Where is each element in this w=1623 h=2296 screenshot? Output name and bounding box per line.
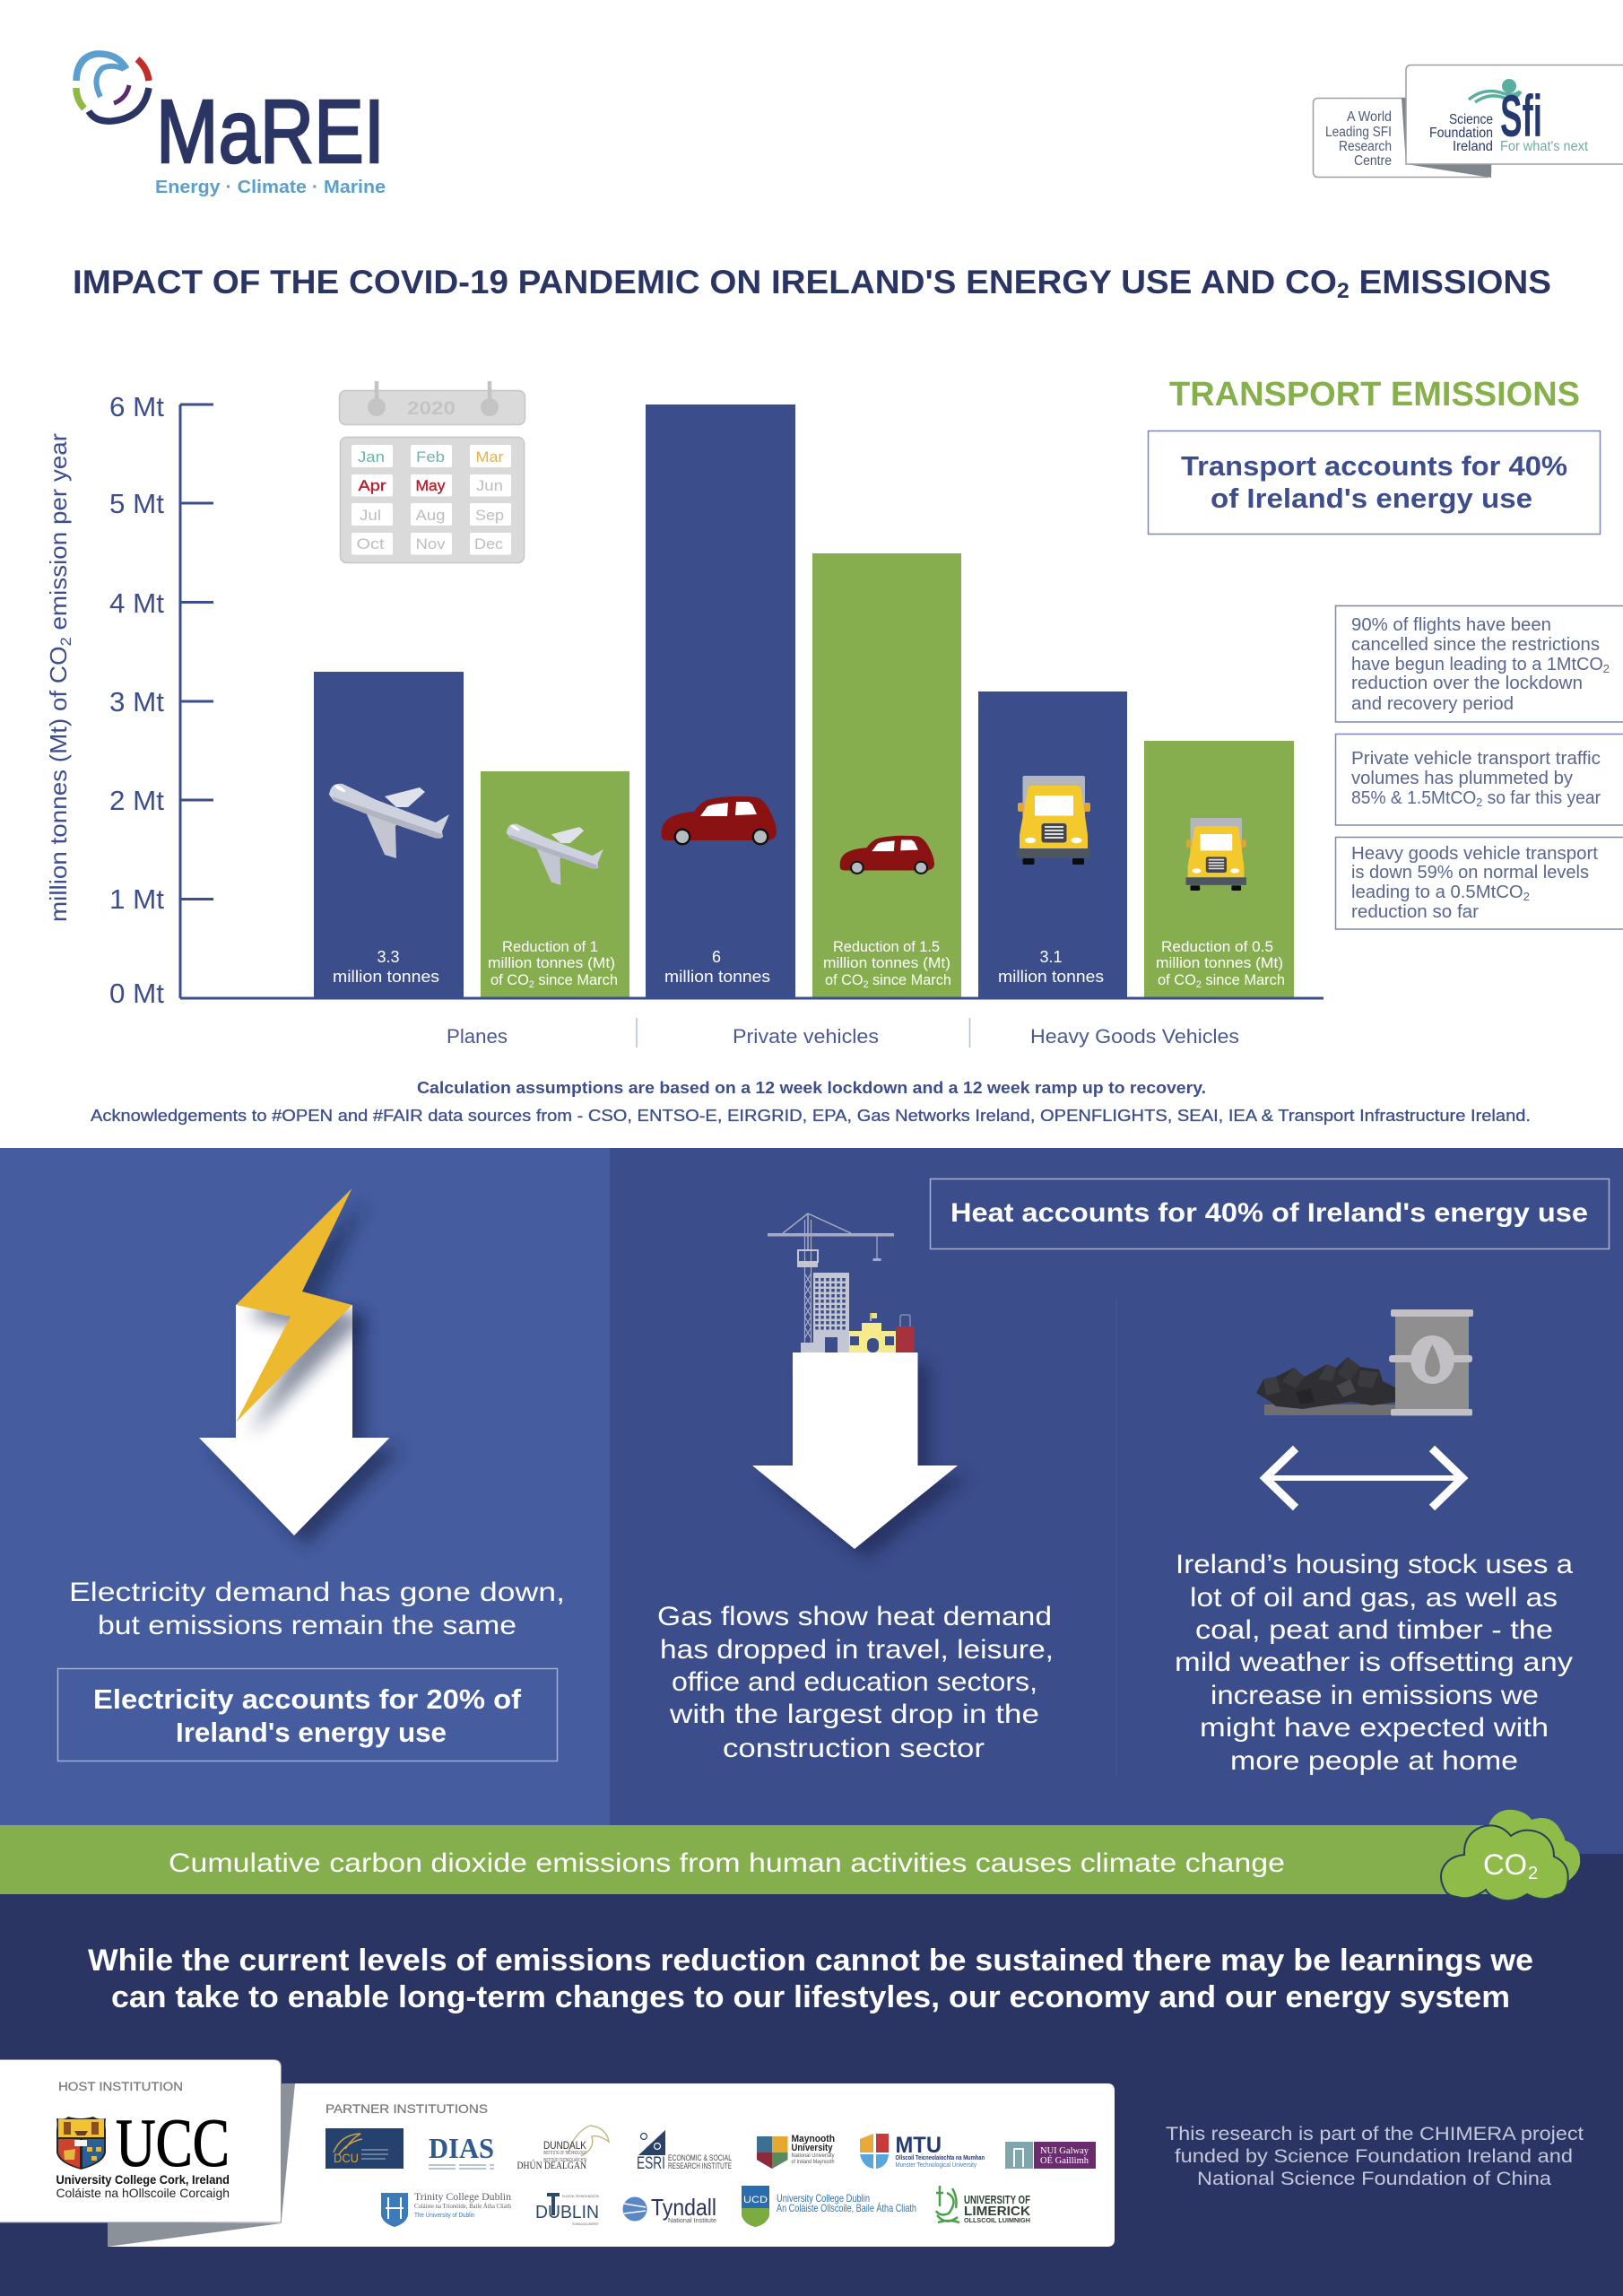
text: gas flows <box>657 1602 1054 1763</box>
text: gas flows: has dropped in travel, leisure, <box>660 1635 1054 1665</box>
text: housing stock <box>1175 1550 1574 1776</box>
callout: transport share <box>1148 430 1600 535</box>
logo: UCD <box>742 2186 916 2227</box>
logo: MaREI <box>76 54 386 197</box>
note: private vehicles: volumes has plummeted by <box>1351 769 1573 788</box>
logo: UCD: UCD <box>743 2195 768 2205</box>
logo: Dundalk Institute of Technology: DHÚN DEALGAN <box>516 2159 586 2171</box>
note: heavy goods vehicles: leading to a 0.5MtCO <box>1351 883 1521 902</box>
category labels: Private vehicles <box>733 1025 879 1048</box>
text: housing stock: lot of oil and gas, as well as <box>1190 1583 1558 1613</box>
logo: Tyndall <box>622 2194 716 2224</box>
panel: host institution: UCC <box>116 2106 230 2181</box>
bar: planes reduction <box>481 771 629 998</box>
note: private vehicles <box>1336 734 1623 825</box>
logo: ESRI: RESEARCH INSTITUTE <box>668 2161 732 2171</box>
bar: planes reduction: since March <box>534 971 618 988</box>
bar: private vehicles baseline <box>646 404 795 998</box>
logo: MaREI: MaREI <box>156 82 385 182</box>
y axis: 4 Mt <box>109 587 164 619</box>
logo: University of Limerick <box>936 2186 1030 2224</box>
logo: Maynooth University: Maynooth <box>791 2134 835 2144</box>
icon: 2020 calendar: Jan <box>358 448 385 465</box>
logo: University of Limerick: LIMERICK <box>964 2204 1030 2219</box>
note: private vehicles: so far this year <box>1482 788 1601 808</box>
logo: ESRI <box>637 2130 732 2173</box>
logo: DIAS: DIAS <box>429 2132 494 2164</box>
icon: CO2 cloud: 2 <box>1528 1864 1538 1883</box>
logo: MTU: Munster Technological University <box>895 2162 976 2169</box>
bar: planes baseline: million tonnes <box>333 968 439 986</box>
icon: 2020 calendar: Dec <box>474 535 504 552</box>
panel: host institution: Coláiste na hOllscoile Corcaigh <box>56 2186 230 2200</box>
logo: Maynooth University <box>757 2134 835 2169</box>
banner: climate change: Cumulative carbon dioxide emissions from human activities causes climate change <box>169 1848 1285 1878</box>
note: heavy goods vehicles <box>1336 838 1623 929</box>
bar: heavy goods vehicles reduction: million tonnes (Mt) <box>1156 954 1283 971</box>
logo: ESRI: ECONOMIC & SOCIAL <box>668 2153 732 2163</box>
logo: Dundalk Institute of Technology <box>516 2126 609 2171</box>
note: heavy goods vehicles: Heavy goods vehicle transport <box>1351 844 1598 864</box>
title: EMISSIONS <box>1350 264 1551 300</box>
icon: 2020 calendar: Nov <box>416 535 446 552</box>
logo: SFI research centre <box>1313 65 1623 178</box>
footnote: assumptions and acknowledgements <box>91 1079 1531 1125</box>
card: Science Foundation Ireland: Sfi <box>1500 83 1542 149</box>
note: flights: and recovery period <box>1351 694 1514 714</box>
logo: ESRI: ESRI <box>637 2154 665 2173</box>
note: flights: reduction over the lockdown <box>1351 674 1583 693</box>
conclusion statement <box>88 1944 1533 2014</box>
icon: 2020 calendar: Jul <box>360 507 381 524</box>
bar: planes reduction: million tonnes (Mt) <box>488 954 615 971</box>
logo: Maynooth University: of Ireland Maynooth <box>791 2160 834 2165</box>
logo: NUI Galway: OÉ Gaillimh <box>1040 2155 1089 2166</box>
text: housing stock: increase in emissions we <box>1211 1681 1539 1710</box>
logo: DCU: DCU <box>334 2151 359 2165</box>
note: flights: have begun leading to a 1MtCO <box>1351 655 1604 674</box>
bar: private vehicles reduction: Reduction of 1.5 <box>833 938 940 955</box>
y axis: million tonnes (Mt) of CO <box>45 664 72 922</box>
panel: partner institutions <box>108 2083 1115 2247</box>
y axis: 2 <box>57 637 74 646</box>
bar: planes reduction: 2 <box>529 979 534 990</box>
bar: private vehicles reduction <box>812 553 961 998</box>
text: electricity demand: but emissions remain the same <box>98 1611 516 1640</box>
logo: NUI Galway: NUI Galway <box>1040 2145 1089 2156</box>
card: A World Leading SFI Research Centre: A World <box>1347 109 1392 125</box>
bar: planes reduction: Reduction of 1 <box>502 938 598 955</box>
note: flights: 90% of flights have been <box>1351 615 1551 635</box>
logo: TU Dublin: DUBLIN <box>535 2203 599 2222</box>
bar: planes baseline: 3.3 <box>377 948 400 966</box>
card: A World Leading SFI Research Centre: Centre <box>1354 153 1392 169</box>
text: gas flows: with the largest drop in the <box>669 1700 1039 1729</box>
note: flights: cancelled since the restrictions <box>1351 635 1600 655</box>
icon: 2020 calendar: Sep <box>475 507 504 524</box>
text: CHIMERA acknowledgement: funded by Science Foundation Ireland and <box>1175 2146 1573 2167</box>
heading: partner institutions: PARTNER INSTITUTIONS <box>325 2101 488 2116</box>
conclusion statement: While the current levels of emissions reduction cannot be sustained there may be learnings we <box>88 1944 1533 1978</box>
text: electricity demand <box>69 1578 565 1640</box>
y axis: 2 Mt <box>109 785 164 816</box>
logo: UCD: University College Dublin <box>777 2192 870 2205</box>
footnote: assumptions and acknowledgements: Calculation assumptions are based on a 12 week lockdown and a 12 week ramp up to recovery. <box>417 1079 1206 1097</box>
icon: 2020 calendar: Aug <box>416 507 445 524</box>
logo: TU Dublin: OLLSCOIL TEICNEOLAÍOCHTA <box>562 2194 599 2198</box>
logo: NUI Galway <box>1005 2142 1096 2169</box>
bar: private vehicles reduction: million tonnes (Mt) <box>823 954 950 971</box>
logo: MaREI: Energy · Climate · Marine <box>155 178 386 197</box>
note: private vehicles: Private vehicle transport traffic <box>1351 749 1601 769</box>
icon: 2020 calendar: Apr <box>359 477 386 494</box>
note: private vehicles: 2 <box>1476 796 1482 809</box>
icon: construction and buildings on down arrow <box>752 1213 969 1560</box>
card: A World Leading SFI Research Centre <box>1313 98 1491 178</box>
bar: heavy goods vehicles baseline: 3.1 <box>1039 948 1063 966</box>
y axis <box>45 391 213 1009</box>
panel: electricity <box>0 1148 610 1854</box>
logo: University of Limerick: UNIVERSITY OF <box>964 2193 1030 2206</box>
logo: Tyndall: National Institute <box>668 2218 716 2224</box>
bar: heavy goods vehicles reduction: since March <box>1202 971 1285 988</box>
category labels: Planes <box>447 1025 508 1048</box>
logo: DCU <box>325 2128 404 2169</box>
note: heavy goods vehicles: reduction so far <box>1351 902 1479 922</box>
callout: electricity share: Ireland's energy use <box>176 1717 447 1748</box>
note: heavy goods vehicles: is down 59% on normal levels <box>1351 863 1589 883</box>
card: Science Foundation Ireland <box>1406 65 1623 164</box>
icon: coal and oil barrel <box>1256 1309 1473 1415</box>
text: gas flows: Gas flows show heat demand <box>657 1602 1052 1631</box>
callout: transport share: Transport accounts for 40% <box>1181 450 1567 482</box>
text: housing stock: more people at home <box>1230 1746 1518 1776</box>
icon: suitcase <box>896 1315 915 1352</box>
text: housing stock: mild weather is offsetting any <box>1175 1648 1573 1677</box>
icon: school <box>849 1313 896 1352</box>
panel: heat background <box>610 1148 1623 1854</box>
logo: TU Dublin: TECHNOLOGICAL UNIVERSITY <box>572 2222 599 2226</box>
note: flights: 2 <box>1603 662 1610 675</box>
text: CHIMERA acknowledgement: National Science Foundation of China <box>1197 2169 1551 2189</box>
card: Science Foundation Ireland: Foundation <box>1429 126 1493 141</box>
conclusion statement: can take to enable long-term changes to our lifestyles, our economy and our energy system <box>111 1980 1510 2014</box>
logo: Maynooth University: National University <box>791 2153 834 2159</box>
card: A World Leading SFI Research Centre: Research <box>1339 139 1392 154</box>
bar: planes baseline <box>314 672 464 998</box>
text: CHIMERA acknowledgement: This research is part of the CHIMERA project <box>1166 2124 1584 2144</box>
callout: heat share: Heat accounts for 40% of Ireland's energy use <box>950 1198 1588 1228</box>
bar: heavy goods vehicles reduction: 2 <box>1196 979 1202 990</box>
card: A World Leading SFI Research Centre: Leading SFI <box>1325 125 1392 140</box>
bar: private vehicles reduction: of CO <box>825 971 864 988</box>
bar: heavy goods vehicles reduction: Reduction of 0.5 <box>1161 938 1273 955</box>
heading: transport emissions: TRANSPORT EMISSIONS <box>1169 376 1580 413</box>
note: flights <box>1336 606 1623 722</box>
logo: Trinity College Dublin: Trinity College Dublin <box>414 2190 511 2203</box>
bar: heavy goods vehicles reduction <box>1144 741 1294 998</box>
note: heavy goods vehicles: 2 <box>1523 890 1530 903</box>
icon: barrel <box>1389 1309 1473 1415</box>
banner: climate change <box>0 1825 1488 1894</box>
callout: electricity share: Electricity accounts for 20% of <box>93 1683 522 1715</box>
icon: 2020 calendar: Oct <box>357 535 385 552</box>
bar: private vehicles reduction: since March <box>868 971 951 988</box>
callout: electricity share <box>57 1668 558 1761</box>
logo: MTU: MTU <box>895 2133 942 2158</box>
bar: private vehicles reduction: 2 <box>864 979 868 990</box>
title: 2 <box>1337 279 1350 303</box>
callout: transport share: of Ireland's energy use <box>1211 483 1532 514</box>
card: Science Foundation Ireland: Science <box>1449 112 1493 127</box>
footnote: assumptions and acknowledgements: Acknowledgements to #OPEN and #FAIR data sources from - CSO, ENTSO-E, EIRGRID, EPA, Gas Networks Ireland, OPENFLIGHTS, SEAI, IEA & Transport Infrastructure Ireland. <box>91 1107 1531 1125</box>
card: Science Foundation Ireland: Ireland <box>1453 139 1493 154</box>
y axis: 6 Mt <box>109 391 164 422</box>
logo: Trinity College Dublin: Coláiste na Tríonóide, Baile Átha Cliath <box>414 2203 511 2210</box>
icon: 2020 calendar: 2020 <box>407 398 456 419</box>
icon: 2020 calendar <box>339 381 525 563</box>
text: housing stock: might have expected with <box>1200 1713 1549 1743</box>
y axis: 5 Mt <box>109 488 164 519</box>
bar: heavy goods vehicles reduction: of CO <box>1158 971 1197 988</box>
bar: heavy goods vehicles baseline: million tonnes <box>998 968 1104 986</box>
y axis: 3 Mt <box>109 686 164 718</box>
icon: bolt and down arrow <box>199 1188 402 1546</box>
logo: Tyndall: Tyndall <box>651 2194 716 2221</box>
logo: Trinity College Dublin: The University of Dublin <box>414 2211 475 2219</box>
y axis: emission per year <box>45 433 72 637</box>
bar: heavy goods vehicles baseline <box>978 691 1127 998</box>
logo: TU Dublin <box>535 2193 599 2226</box>
text: gas flows: office and education sectors, <box>672 1667 1037 1697</box>
icon: 2020 calendar: May <box>416 477 446 494</box>
bar chart: transport emissions <box>45 391 1324 1048</box>
logo: Trinity College Dublin <box>381 2190 511 2227</box>
icon: crane <box>768 1213 894 1352</box>
text: gas flows: construction sector <box>723 1734 985 1763</box>
logo: UCD: An Coláiste Ollscoile, Baile Átha Cliath <box>777 2201 916 2214</box>
logo: Dundalk Institute of Technology: INSTITUTE OF TECHNOLOGY <box>543 2151 586 2156</box>
icon: coal <box>1256 1357 1395 1415</box>
arrow: double-headed <box>1264 1448 1463 1508</box>
text: housing stock: Ireland’s housing stock uses a <box>1176 1550 1574 1579</box>
callout: heat share <box>931 1178 1609 1248</box>
title: IMPACT OF THE COVID-19 PANDEMIC ON IRELAND'S ENERGY USE AND CO <box>73 264 1285 300</box>
heading: host institution: HOST INSTITUTION <box>58 2080 183 2093</box>
category labels: Heavy Goods Vehicles <box>1030 1025 1239 1048</box>
logo: Maynooth University: University <box>791 2143 833 2153</box>
logo: Dundalk Institute of Technology: DUNDALK <box>543 2139 586 2152</box>
panel: host institution: University College Cork, Ireland <box>56 2172 230 2187</box>
icon: office building <box>813 1273 849 1352</box>
text: electricity demand: Electricity demand has gone down, <box>69 1578 565 1607</box>
icon: CO2 cloud: CO <box>1483 1848 1527 1881</box>
text: CHIMERA acknowledgement <box>1166 2124 1584 2189</box>
icon: 2020 calendar: Mar <box>475 448 504 465</box>
icon: CO2 cloud <box>1441 1810 1580 1900</box>
logo: Dundalk Institute of Technology: INSTITIÚID TEICNEOLAÍOCHTA <box>543 2157 586 2163</box>
logo: MTU <box>860 2133 985 2169</box>
card: Science Foundation Ireland: For what's next <box>1500 139 1589 154</box>
bar: private vehicles baseline: 6 <box>712 948 721 966</box>
note: private vehicles: 85% & 1.5MtCO <box>1351 788 1481 808</box>
bar: planes reduction: of CO <box>490 971 530 988</box>
category labels <box>447 1025 1239 1048</box>
icon: UCC crest <box>56 2117 106 2170</box>
panel: navy footer <box>0 1854 1623 2296</box>
y axis: 0 Mt <box>109 978 164 1009</box>
panel: host institution <box>0 2059 282 2222</box>
y axis: 1 Mt <box>109 883 164 915</box>
icon: 2020 calendar: Jun <box>476 477 503 494</box>
bar: private vehicles baseline: million tonnes <box>664 968 770 986</box>
icon: 2020 calendar: Feb <box>416 448 445 465</box>
logo: University of Limerick: OLLSCOIL LUIMNIGH <box>964 2218 1030 2224</box>
text: housing stock: coal, peat and timber - the <box>1195 1615 1553 1645</box>
logo: MTU: Ollscoil Teicneolaíochta na Mumhan <box>895 2155 985 2161</box>
